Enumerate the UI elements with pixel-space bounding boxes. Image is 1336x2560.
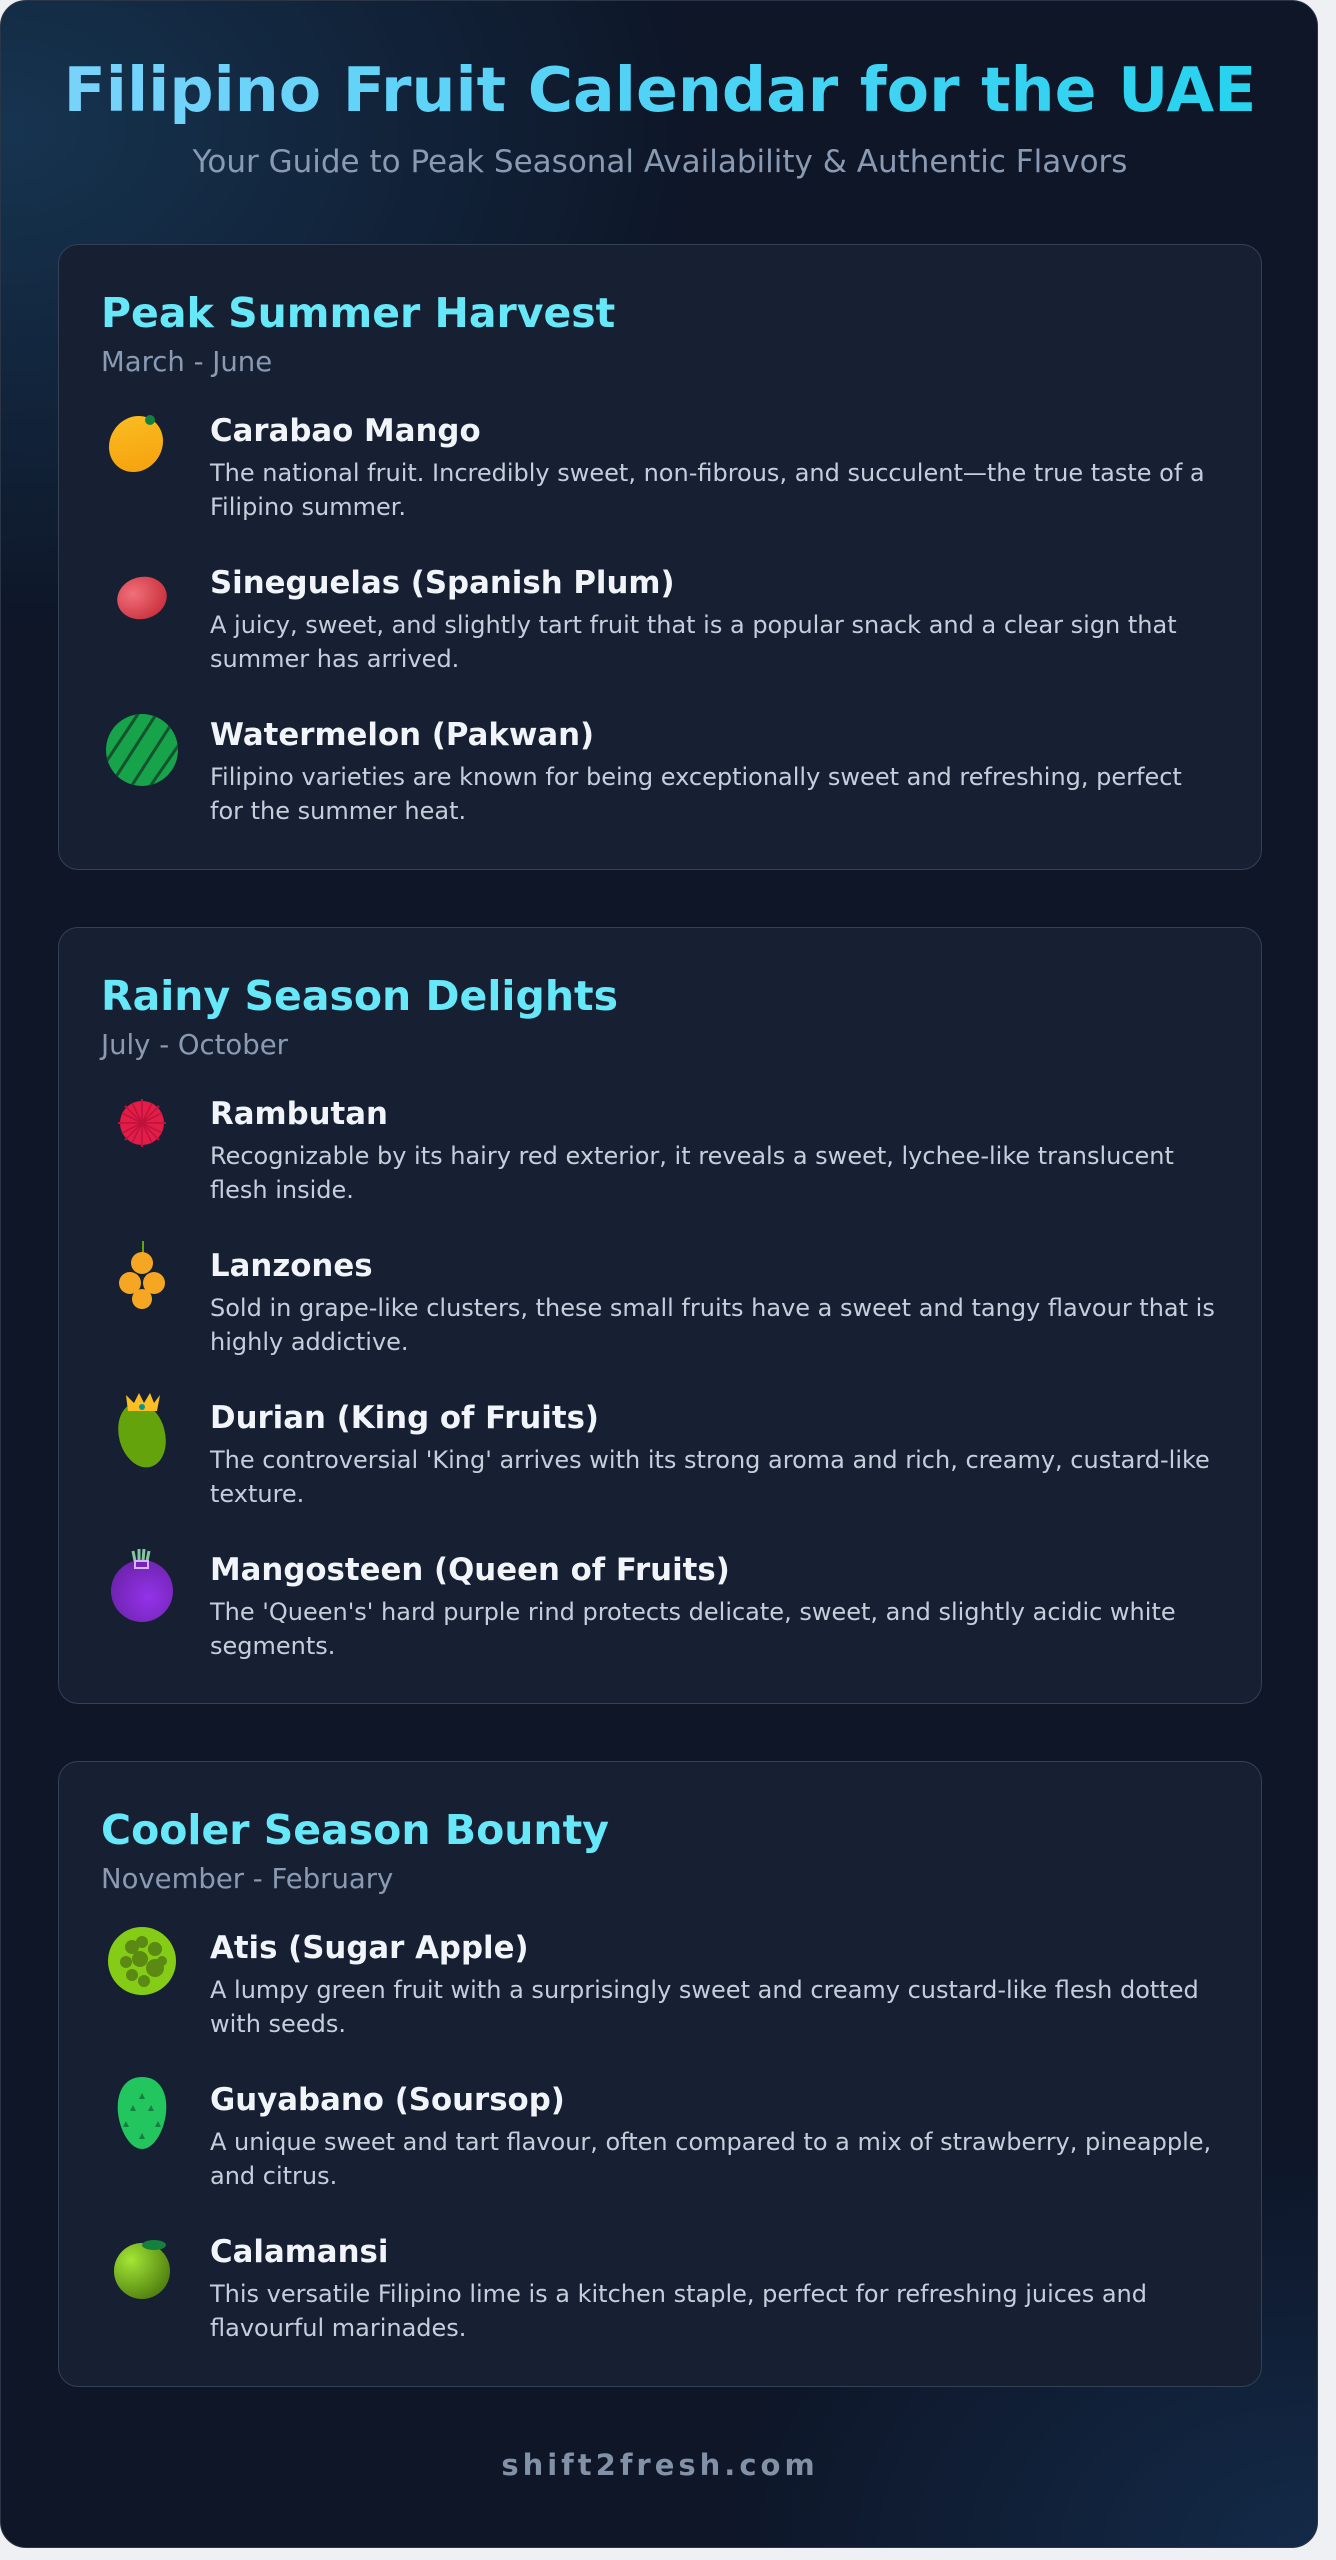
item: durian: texture. bbox=[210, 1480, 304, 1508]
title: Filipino Fruit Calendar for the UAE bbox=[64, 54, 1256, 126]
heading: summer: Peak Summer Harvest bbox=[101, 289, 615, 337]
item: mangosteen bbox=[111, 1548, 1176, 1660]
item: mangosteen: The 'Queen's' hard purple rind protects delicate, sweet, and slightly acidic white segments. bbox=[210, 1598, 1176, 1660]
item: carabao mango: Carabao Mango bbox=[210, 413, 481, 449]
item: calamansi: Calamansi bbox=[210, 2234, 388, 2270]
item: carabao mango: The national fruit. Incredibly sweet, non-fibrous, and succulent—the true taste of a Filipino summer. bbox=[210, 459, 1205, 521]
icon: calamansi bbox=[114, 2240, 170, 2299]
item: durian bbox=[118, 1393, 1210, 1508]
item: sineguelas: A juicy, sweet, and slightly tart fruit that is a popular snack and a clear sign that summer has arrived. bbox=[210, 611, 1177, 673]
item: rambutan: Rambutan bbox=[210, 1096, 388, 1132]
heading: cooler: Cooler Season Bounty bbox=[101, 1806, 609, 1854]
item: carabao mango bbox=[109, 413, 1205, 521]
item: atis bbox=[108, 1927, 1199, 2038]
item: guyabano: A unique sweet and tart flavour, often compared to a mix of strawberry, pineapple, bbox=[210, 2128, 1211, 2156]
item: lanzones: highly addictive. bbox=[210, 1328, 409, 1356]
date: summer: March - June bbox=[101, 346, 272, 378]
item: watermelon bbox=[106, 714, 1182, 825]
icon: rambutan bbox=[118, 1099, 166, 1147]
icon: plum bbox=[117, 576, 167, 620]
item: sineguelas bbox=[117, 565, 1177, 673]
item: atis: Atis (Sugar Apple) bbox=[210, 1930, 529, 1966]
panel: rainy season delights bbox=[58, 927, 1262, 1704]
item: sineguelas: Sineguelas (Spanish Plum) bbox=[210, 565, 675, 601]
item: lanzones bbox=[119, 1241, 1215, 1356]
item: durian: Durian (King of Fruits) bbox=[210, 1400, 599, 1436]
item: guyabano bbox=[118, 2077, 1211, 2190]
heading: rainy: Rainy Season Delights bbox=[101, 972, 618, 1020]
icon: lanzones bbox=[119, 1241, 165, 1309]
icon: watermelon bbox=[106, 714, 178, 786]
date: rainy: July - October bbox=[101, 1029, 288, 1061]
item: lanzones: Lanzones bbox=[210, 1248, 373, 1284]
item: guyabano: Guyabano (Soursop) bbox=[210, 2082, 565, 2118]
item: atis: A lumpy green fruit with a surprisingly sweet and creamy custard-like flesh dotted with seeds. bbox=[210, 1976, 1199, 2038]
icon: mango bbox=[109, 415, 163, 472]
icon: guyabano bbox=[118, 2077, 166, 2149]
item: mangosteen: Mangosteen (Queen of Fruits) bbox=[210, 1552, 730, 1588]
icon: durian bbox=[118, 1393, 166, 1468]
footer: shift2fresh.com bbox=[501, 2448, 819, 2482]
item: guyabano: and citrus. bbox=[210, 2162, 337, 2190]
icon: atis bbox=[108, 1927, 176, 1995]
item: rambutan bbox=[118, 1096, 1174, 1204]
item: calamansi bbox=[114, 2234, 1147, 2342]
item: watermelon: for the summer heat. bbox=[210, 797, 466, 825]
panel: peak summer harvest bbox=[58, 244, 1262, 870]
icon: mangosteen bbox=[111, 1548, 173, 1622]
item: calamansi: This versatile Filipino lime is a kitchen staple, perfect for refreshing juices and flavourful marinades. bbox=[210, 2280, 1147, 2342]
subtitle: Your Guide to Peak Seasonal Availability & Authentic Flavors bbox=[193, 144, 1127, 180]
item: watermelon: Filipino varieties are known for being exceptionally sweet and refreshing, perfect bbox=[210, 763, 1182, 791]
item: lanzones: Sold in grape-like clusters, these small fruits have a sweet and tangy flavour that is bbox=[210, 1294, 1215, 1322]
panel: cooler season bounty bbox=[58, 1761, 1262, 2387]
date: cooler: November - February bbox=[101, 1863, 393, 1895]
item: watermelon: Watermelon (Pakwan) bbox=[210, 717, 594, 753]
item: durian: The controversial 'King' arrives with its strong aroma and rich, creamy, custard-like bbox=[210, 1446, 1210, 1474]
item: rambutan: Recognizable by its hairy red exterior, it reveals a sweet, lychee-like translucent flesh inside. bbox=[210, 1142, 1174, 1204]
